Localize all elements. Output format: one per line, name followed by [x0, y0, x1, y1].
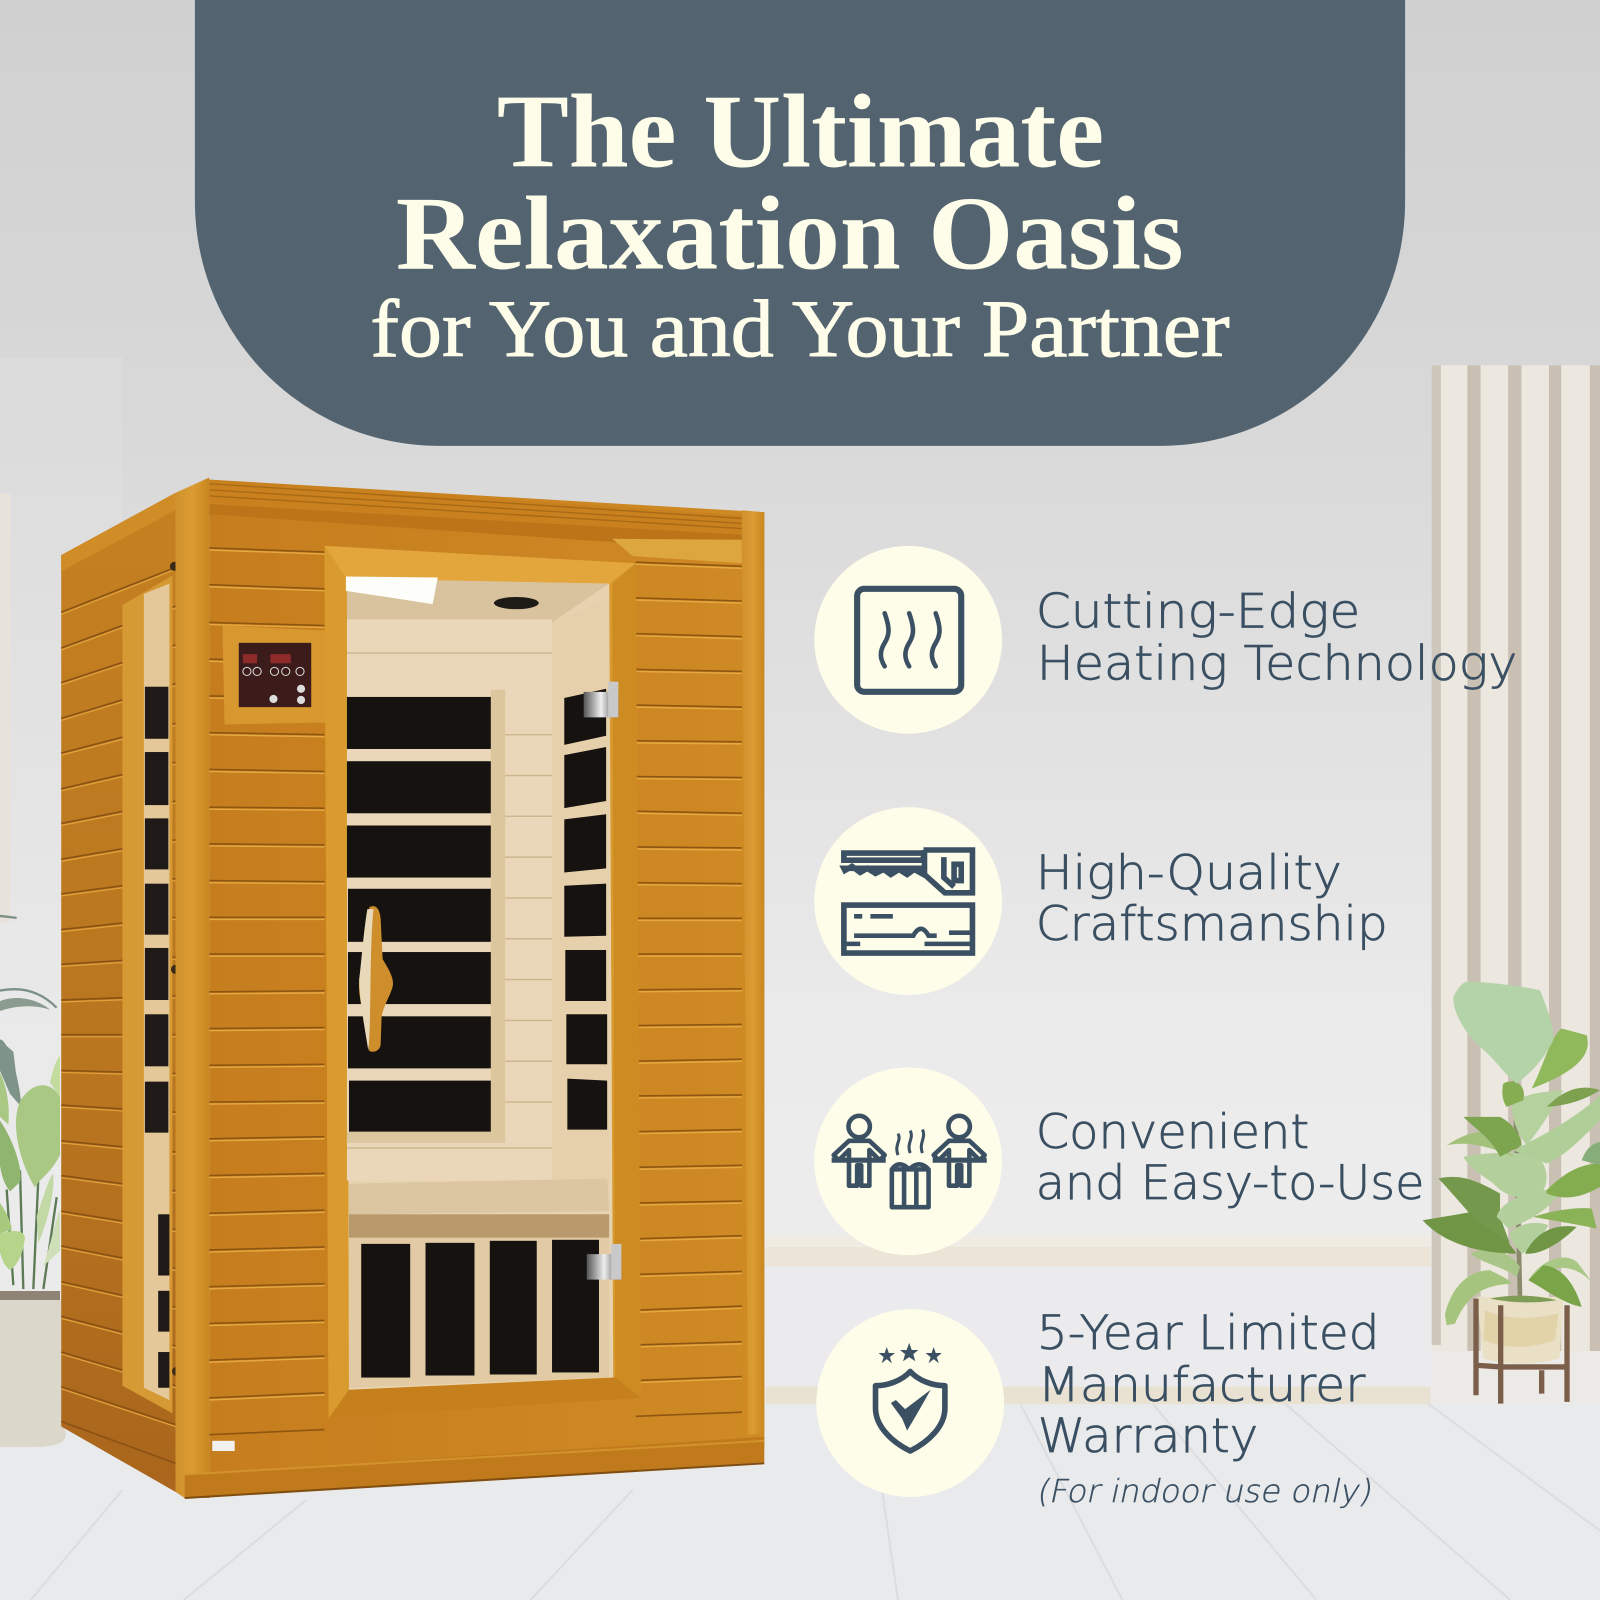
pot [1477, 1297, 1563, 1364]
icon: two people and sauna heater [832, 1116, 987, 1207]
background: wall slats [1432, 365, 1600, 1404]
sauna cabin [61, 478, 764, 1498]
left plant and basket [0, 916, 66, 1447]
feature: warranty [816, 1306, 1380, 1510]
text: indoor use note: (For indoor use only) [1034, 1472, 1377, 1510]
feature: heating technology [814, 546, 1517, 734]
lower heater panels [349, 1238, 609, 1388]
side wall heater panels [564, 689, 607, 1130]
text: cutting-edge heating technology: Heating Technology [1037, 637, 1517, 692]
text: 5-year limited manufacturer warranty: Warranty [1038, 1409, 1258, 1464]
door hinges [584, 682, 621, 1280]
sauna front face [209, 480, 764, 1485]
leaves [1445, 1270, 1512, 1325]
label sticker [212, 1441, 235, 1451]
door frame [324, 546, 641, 1418]
background: bench and floor [0, 1235, 1600, 1600]
title line 2: Relaxation Oasis [396, 174, 1184, 291]
text: 5-year limited manufacturer warranty [1037, 1306, 1380, 1464]
text: high-quality craftsmanship [1036, 846, 1388, 952]
icon: shield with stars [876, 1343, 945, 1451]
sauna interior [346, 577, 613, 1390]
front plank lines [209, 548, 742, 1435]
feature: craftsmanship [814, 807, 1388, 995]
side window [122, 576, 172, 1413]
title line 3: for You and Your Partner [370, 283, 1230, 374]
bench [349, 1179, 609, 1214]
text: 5-year limited manufacturer warranty: 5-Year Limited [1037, 1306, 1380, 1361]
text: cutting-edge heating technology [1036, 585, 1517, 692]
back wall heater panels [347, 697, 491, 1132]
feature: ease of use [814, 1067, 1424, 1255]
ceiling light and vent [346, 577, 438, 604]
base [185, 1437, 764, 1498]
corner and side posts [176, 478, 209, 1498]
text: high-quality craftsmanship: Craftsmanship [1036, 897, 1388, 952]
text: 5-year limited manufacturer warranty: Manufacturer [1038, 1358, 1366, 1413]
text: convenient and easy-to-use: Convenient [1036, 1105, 1309, 1160]
door handle [359, 906, 393, 1052]
text: high-quality craftsmanship: High-Quality [1036, 846, 1342, 901]
text: cutting-edge heating technology: Cutting-Edge [1036, 585, 1360, 640]
sauna left side panel [61, 493, 181, 1492]
text: convenient and easy-to-use: and Easy-to-Use [1036, 1156, 1424, 1211]
right plant in pot [1423, 982, 1600, 1404]
top molding [209, 480, 742, 535]
icon: saw and board [844, 850, 972, 953]
title banner [195, 0, 1405, 446]
stand [1476, 1299, 1567, 1404]
title line 1: The Ultimate [497, 72, 1104, 189]
text: convenient and easy-to-use [1036, 1105, 1424, 1211]
control panel [222, 626, 326, 724]
icon: heating panel [857, 589, 961, 692]
